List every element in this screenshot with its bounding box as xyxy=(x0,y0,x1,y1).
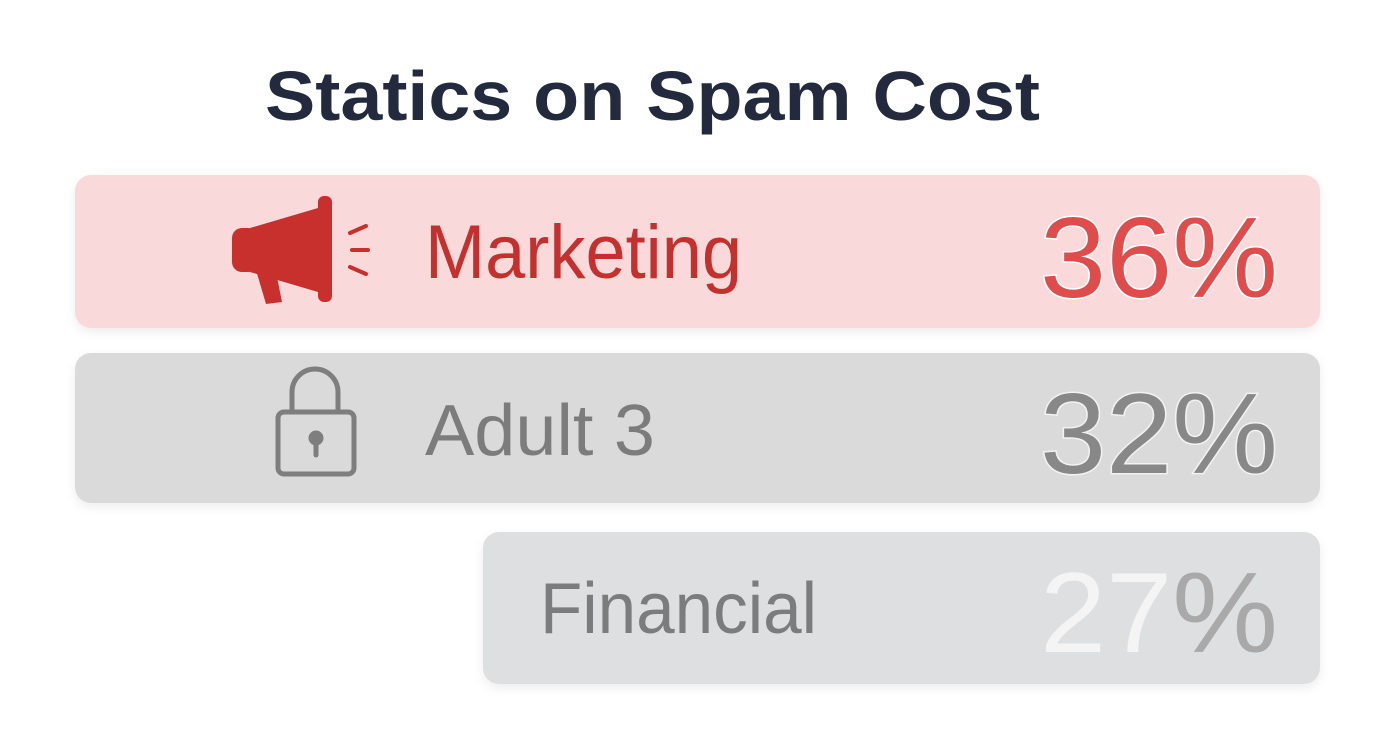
label: adult: Adult 3 xyxy=(425,391,655,471)
title: Statics on Spam Cost xyxy=(265,57,1040,135)
panel: adult xyxy=(75,353,1320,503)
value: 32%: 32% xyxy=(1040,371,1278,498)
value: 36%: 36% xyxy=(1040,195,1278,322)
label: marketing: Marketing xyxy=(425,210,742,295)
icon: lock xyxy=(278,369,354,474)
icon: megaphone xyxy=(232,196,368,304)
panel: marketing xyxy=(75,175,1320,328)
panel: financial xyxy=(483,532,1320,684)
value: 27%: 27% xyxy=(1040,550,1278,677)
label: financial: Financial xyxy=(540,569,817,649)
